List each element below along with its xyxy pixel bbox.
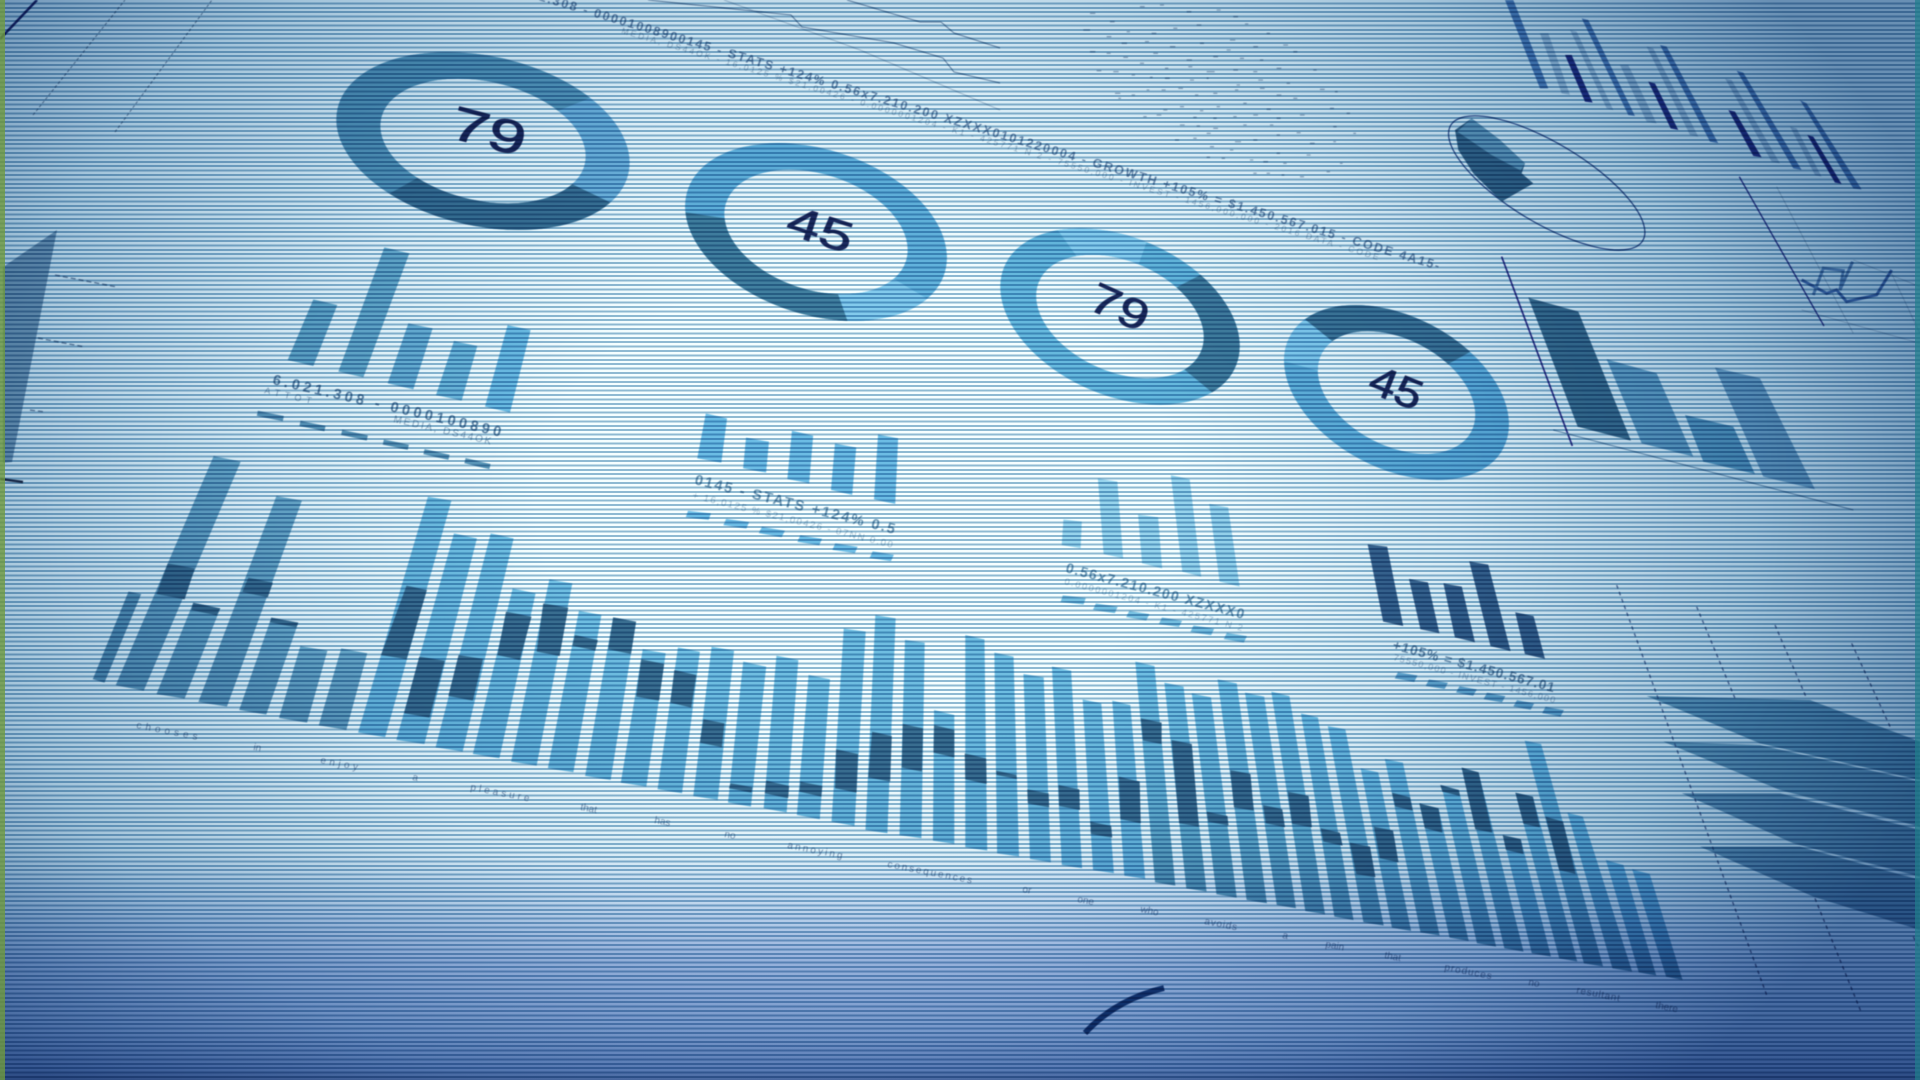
donut: 79 light: 79 (1082, 274, 1157, 341)
arc stroke, bottom (1085, 988, 1164, 1033)
axis labels: chooses (135, 720, 198, 743)
wedge bars, lower right (1617, 585, 1920, 1013)
axis labels: enjoy (319, 755, 359, 773)
faint line chart, top (648, 0, 1000, 110)
axis labels: has (653, 815, 671, 829)
small bar chart B: 0145 - STATS +124% 0.5 (693, 472, 897, 538)
small bar chart C (1062, 475, 1246, 639)
axis labels: annoying (786, 840, 843, 862)
axis labels: that (1383, 950, 1402, 964)
small bar chart C: 0.0000001204 - K1 - 425771 N 2 (1063, 576, 1244, 633)
axis labels: avoids (1203, 916, 1238, 933)
long diagonal data caption: MEDIA, DS44OK - 16,0125 % $21,00426 - 0.0000001204 - K1 - 425771 N 2 - 75550,000 - INVEST - 1456,000,000 - 2016 DATA - CODE (620, 25, 1380, 262)
donut: 45 right: 45 (1363, 356, 1430, 420)
donut: 45 blue and dark (685, 130, 947, 334)
axis labels: no (1527, 977, 1541, 990)
axis labels: who (1138, 904, 1160, 919)
donut: 79 dark: 79 (445, 97, 532, 167)
axis labels: pain (1324, 939, 1345, 954)
donut: 79 dark (344, 43, 622, 239)
small bar chart B: + 16,0125 % $21,00426 - 07NN 0.00 (691, 490, 894, 551)
pie outline with wedge (1430, 91, 1663, 275)
axis labels: resultant (1575, 985, 1621, 1004)
axis labels: there (1654, 1000, 1679, 1015)
axis labels: pleasure (469, 782, 531, 804)
axis labels: that (579, 802, 598, 816)
left edge shape with dashes (0, 230, 117, 482)
small bar chart A: ATTOT (264, 385, 313, 406)
top right slanted bars (1505, 0, 1862, 189)
bars: left section (93, 456, 866, 826)
small bar chart A: MEDIA, DS44OK (392, 414, 493, 447)
main bar chart (93, 456, 1683, 1015)
small bar chart A (257, 247, 531, 467)
small bar chart B (687, 413, 898, 558)
axis labels: consequences (886, 859, 973, 886)
corner guide lines, top left (0, 0, 212, 132)
bars: right section (865, 615, 1683, 980)
scatter plot, top (1083, 5, 1356, 177)
donut: 45 right (1276, 288, 1517, 497)
axis labels: one (1076, 894, 1095, 908)
axis labels: in (252, 742, 262, 754)
axis labels: a (1281, 930, 1289, 942)
small bar chart D: +105% = $1.450.567.01 (1391, 637, 1557, 695)
small line chart, far right (1739, 177, 1920, 343)
donut: 79 light (952, 176, 1288, 457)
small bar chart D (1368, 544, 1562, 713)
small bar chart C: 0.56x7.210.200 XZXXX0 (1064, 559, 1246, 622)
axis labels: or (1021, 884, 1033, 897)
axis labels (135, 720, 1679, 1015)
small bar chart D: 75550,000 - INVEST - 1456,000 (1392, 652, 1556, 705)
donut: 45 blue and dark: 45 (781, 197, 859, 263)
four bar chart, right (1502, 257, 1853, 510)
small bar chart A: 6.021.308 - 0000100890 (271, 372, 503, 441)
axis labels: produces (1443, 962, 1493, 982)
axis labels: no (723, 829, 737, 842)
axis labels: a (411, 772, 419, 784)
